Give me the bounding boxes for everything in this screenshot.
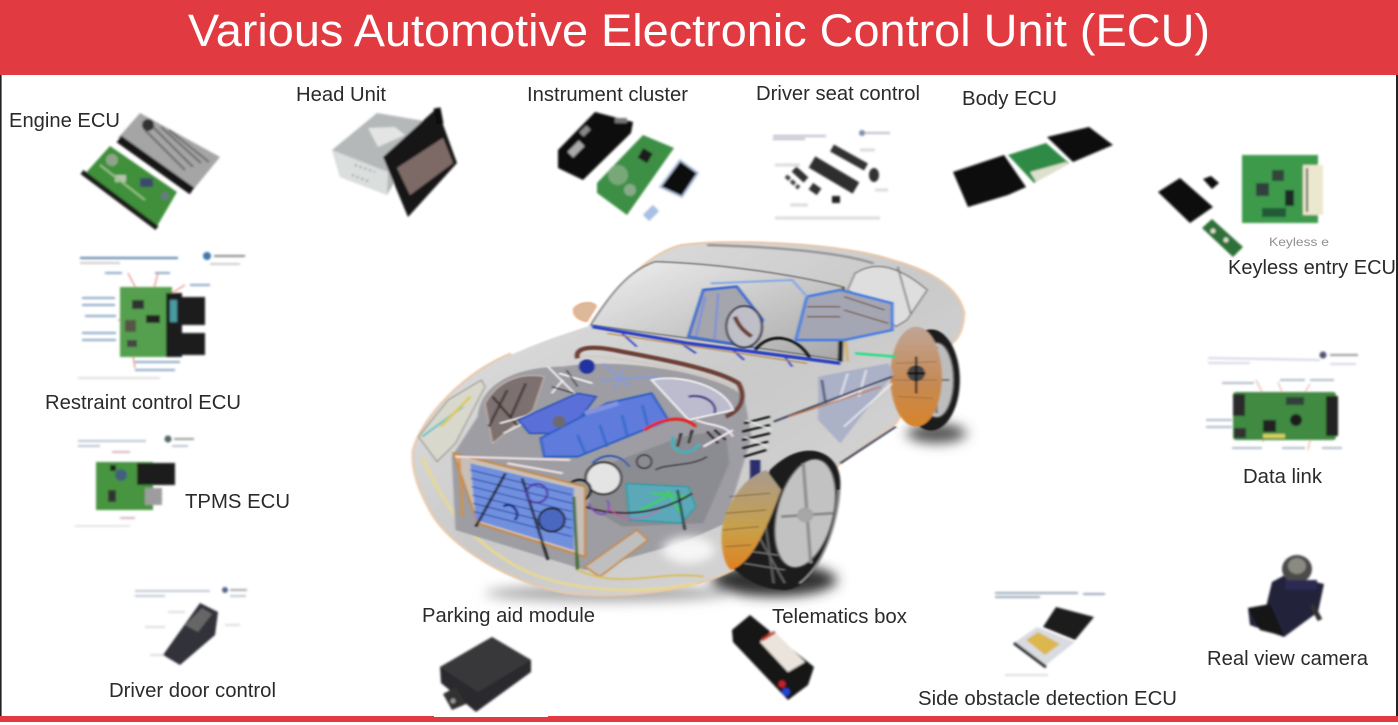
item: Driver door control [109, 587, 276, 702]
item: Data link [1206, 352, 1358, 488]
item: Head Unit: Head Unit [296, 84, 386, 106]
engine bay [452, 348, 752, 570]
item: Body ECU: Body ECU [962, 88, 1057, 110]
item: Body ECU [953, 88, 1113, 207]
item: Driver seat control: Driver seat control [756, 83, 920, 105]
item: Keyless entry ECU: Keyless entry ECU [1228, 257, 1396, 279]
item: Telematics box: Telematics box [772, 606, 907, 628]
item: Side obstacle detection ECU [918, 593, 1177, 710]
item: Instrument cluster: Instrument cluster [527, 84, 688, 106]
item: Head Unit [296, 84, 457, 217]
white label patch over bottom rule [434, 713, 548, 717]
item: Restraint control ECU [45, 252, 245, 414]
engine components [568, 420, 733, 530]
item: Telematics box [732, 606, 907, 700]
item: Parking aid module [422, 605, 595, 712]
aluminium housing [118, 113, 220, 190]
item: Parking aid module: Parking aid module [422, 605, 595, 627]
circuit board [83, 146, 177, 228]
metal chassis [332, 113, 430, 195]
item: Data link: Data link [1243, 466, 1323, 488]
item: Driver door control: Driver door control [109, 680, 276, 702]
item: Keyless entry ECU: Keyless e [1269, 235, 1329, 249]
car shadow [485, 423, 966, 602]
lower bay glow [663, 537, 714, 563]
rear wheel [890, 327, 960, 431]
item: Side obstacle detection ECU: Side obstacle detection ECU [918, 688, 1177, 710]
item: Real view camera: Real view camera [1207, 648, 1369, 670]
headlight [418, 380, 485, 462]
item: Real view camera [1207, 555, 1369, 670]
item: Driver seat control [756, 83, 920, 218]
front wheel [722, 451, 845, 590]
radiator [454, 453, 703, 579]
valve cover [518, 393, 696, 457]
car body shell [413, 242, 964, 595]
windshield [591, 262, 842, 360]
item: Instrument cluster [527, 84, 698, 218]
item: Restraint control ECU: Restraint control ECU [45, 392, 241, 414]
front panel [383, 108, 457, 217]
title banner [0, 0, 1398, 75]
side mirror [574, 302, 596, 322]
coil spring [742, 417, 772, 503]
bottom red rule [0, 716, 1398, 722]
car cutaway illustration [413, 242, 966, 602]
item: Keyless entry ECU [1158, 155, 1396, 279]
item: TPMS ECU: TPMS ECU [185, 491, 290, 513]
title banner: Various Automotive Electronic Control Unit (ECU) [188, 5, 1210, 56]
interior seats and dashboard [592, 280, 896, 463]
item: Engine ECU: Engine ECU [9, 110, 120, 132]
side window [848, 266, 927, 327]
item: TPMS ECU [75, 436, 290, 526]
item: Engine ECU [9, 110, 220, 228]
